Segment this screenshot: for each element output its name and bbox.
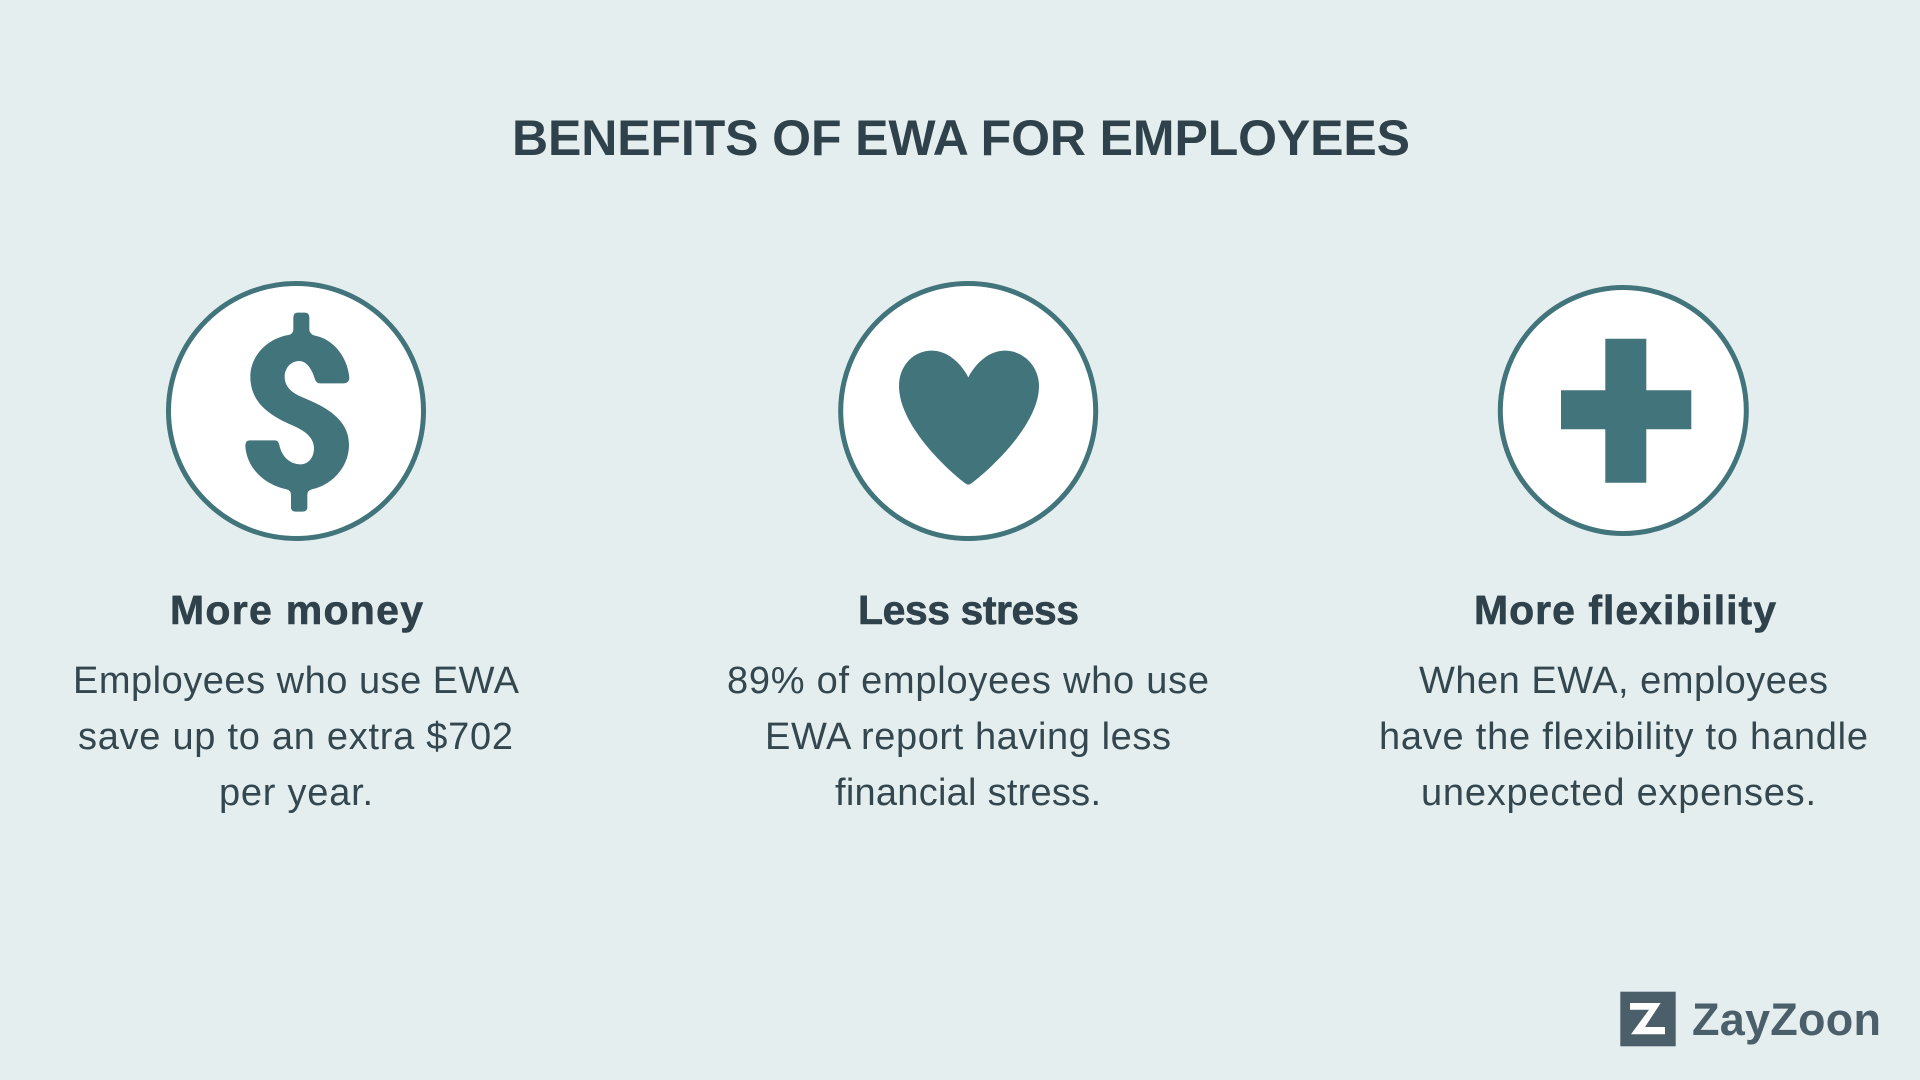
- logo wordmark: ZayZoon: [1692, 994, 1881, 1045]
- icon: heart in circle: [841, 284, 1096, 538]
- icon: plus in circle: [1500, 288, 1746, 534]
- text: less stress description: 89% of employees who use: [727, 660, 1209, 702]
- logo: ZayZoon: [1620, 992, 1881, 1046]
- text: less stress description: [727, 660, 1209, 814]
- panel: less stress: [727, 284, 1209, 814]
- text: more flexibility description: unexpected expenses.: [1421, 772, 1816, 814]
- text: more money description: per year.: [219, 772, 373, 814]
- heading: more money: More money: [170, 587, 423, 633]
- heading: more flexibility: More flexibility: [1474, 587, 1776, 633]
- text: less stress description: EWA report having less: [765, 716, 1171, 758]
- panel: more money: [73, 284, 520, 814]
- title: BENEFITS OF EWA FOR EMPLOYEES: [512, 110, 1410, 166]
- text: more money description: [73, 660, 520, 814]
- text: more money description: Employees who use EWA: [73, 660, 520, 702]
- text: more flexibility description: [1379, 660, 1868, 814]
- text: more flexibility description: have the flexibility to handle: [1379, 716, 1868, 758]
- icon: Z mark: [1620, 992, 1676, 1046]
- panel: more flexibility: [1379, 288, 1868, 814]
- icon: dollar sign in circle: [168, 284, 424, 538]
- text: more flexibility description: When EWA, employees: [1419, 660, 1828, 702]
- heading: less stress: Less stress: [858, 587, 1079, 633]
- text: less stress description: financial stress.: [835, 772, 1101, 814]
- text: more money description: save up to an extra $702: [78, 716, 513, 758]
